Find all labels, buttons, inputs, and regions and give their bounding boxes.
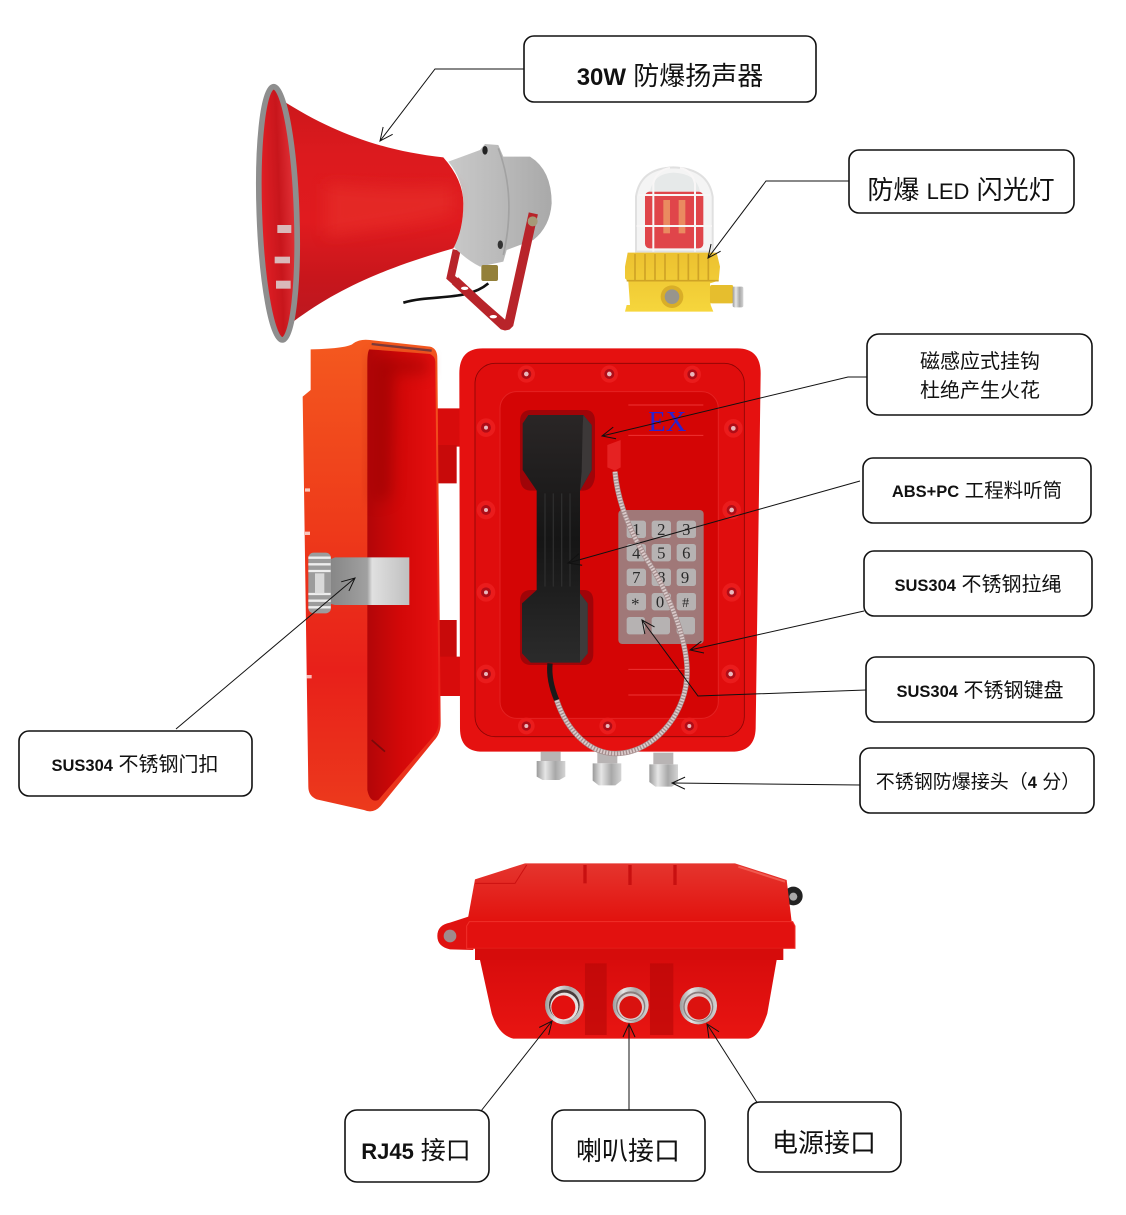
hinge tabs [437,408,460,696]
arrow: handset [568,481,860,563]
icon: explosion-proof LED flash lamp [625,167,743,312]
keypad keys: 4 [632,543,641,562]
arrow: gland [672,783,860,785]
icon: telephone with open door [303,340,761,811]
door outer shell [303,340,441,811]
keypad keys: 2 [657,520,665,539]
cord hook [607,440,621,471]
leader arrows [176,69,867,1111]
recessed front panel [500,392,718,718]
label: RJ45 port [345,1110,489,1182]
lamp red core [645,192,703,248]
lid band [467,922,795,948]
speaker mounting bracket back arm [451,250,503,323]
label: steel keypad [866,657,1094,722]
lamp glass dome [636,167,713,252]
icon: phone housing bottom view [437,863,803,1039]
label: steel gland: 不锈钢防爆接头（4 分） [876,771,1080,793]
label: handset: ABS+PC 工程料听筒 [892,480,1062,502]
label: 30W speaker [524,36,816,102]
label: magnetic hook: 磁感应式挂钩 [920,350,1040,373]
label: steel cord [864,551,1092,616]
icon: explosion-proof horn speaker [255,86,552,341]
arrow: magnetic hook [602,377,867,436]
label: steel gland [860,748,1094,813]
door latch [308,553,409,613]
label: power port [748,1102,901,1172]
keypad keys: 8 [657,568,665,587]
label: magnetic hook: 杜绝产生火花 [920,379,1040,402]
arrow: power port [707,1024,758,1104]
mounting ear [437,915,473,950]
keypad keys: 5 [657,543,665,562]
EX mark: EX [648,406,687,438]
door inner cavity [367,349,439,801]
bracket front arm [455,213,533,326]
speaker gray housing [448,144,552,267]
label: 30W speaker: 30W 防爆扬声器 [577,61,763,91]
label: LED lamp: 防爆 LED 闪光灯 [867,175,1055,205]
keypad keys: 9 [681,568,689,587]
label: LED lamp [849,150,1074,213]
keypad keys: 6 [682,543,690,562]
keypad keys: 3 [682,520,690,539]
label: steel keypad: SUS304 不锈钢键盘 [896,679,1064,702]
metal glands [537,752,678,787]
label: steel cord: SUS304 不锈钢拉绳 [894,573,1062,596]
arrow: RJ45 port [481,1021,552,1111]
handset [522,415,592,663]
arrow: speaker [380,69,524,141]
arrow: steel cord [690,611,864,650]
arrow: keypad [642,620,866,696]
label: RJ45 port: RJ45 接口 [361,1137,471,1165]
arrow: speaker port [628,1024,630,1110]
keypad keys: 0 [656,592,664,611]
keypad keys: # [682,596,689,611]
lamp yellow body [625,253,720,312]
keypad keys: * [631,594,639,613]
panel screws [477,365,743,734]
label: handset [863,458,1091,523]
handset cradles [520,410,595,491]
arrow: LED lamp [708,181,849,258]
label: door latch [19,731,252,796]
arrow: door latch [176,578,355,729]
label: speaker port [552,1110,705,1181]
speaker brass gland [481,265,498,281]
keypad keys [627,520,696,634]
label: magnetic hook [867,334,1092,415]
keypad keys: 7 [632,568,640,587]
armoured steel cord [550,472,687,754]
label: speaker port: 喇叭接口 [576,1136,680,1166]
lid top [467,863,792,922]
right side knob [784,887,803,905]
inner frame line [475,363,744,737]
lamp wire cage [637,168,712,252]
phone body [459,348,761,752]
keypad keys: 1 [632,520,640,539]
cable glands [545,986,717,1024]
label: door latch: SUS304 不锈钢门扣 [51,753,219,776]
horn body [277,100,463,322]
speaker wire [403,283,488,303]
label: power port: 电源接口 [772,1128,876,1158]
keypad plate [618,510,704,644]
lower housing [480,960,777,1039]
horn rim and cone [255,86,301,341]
